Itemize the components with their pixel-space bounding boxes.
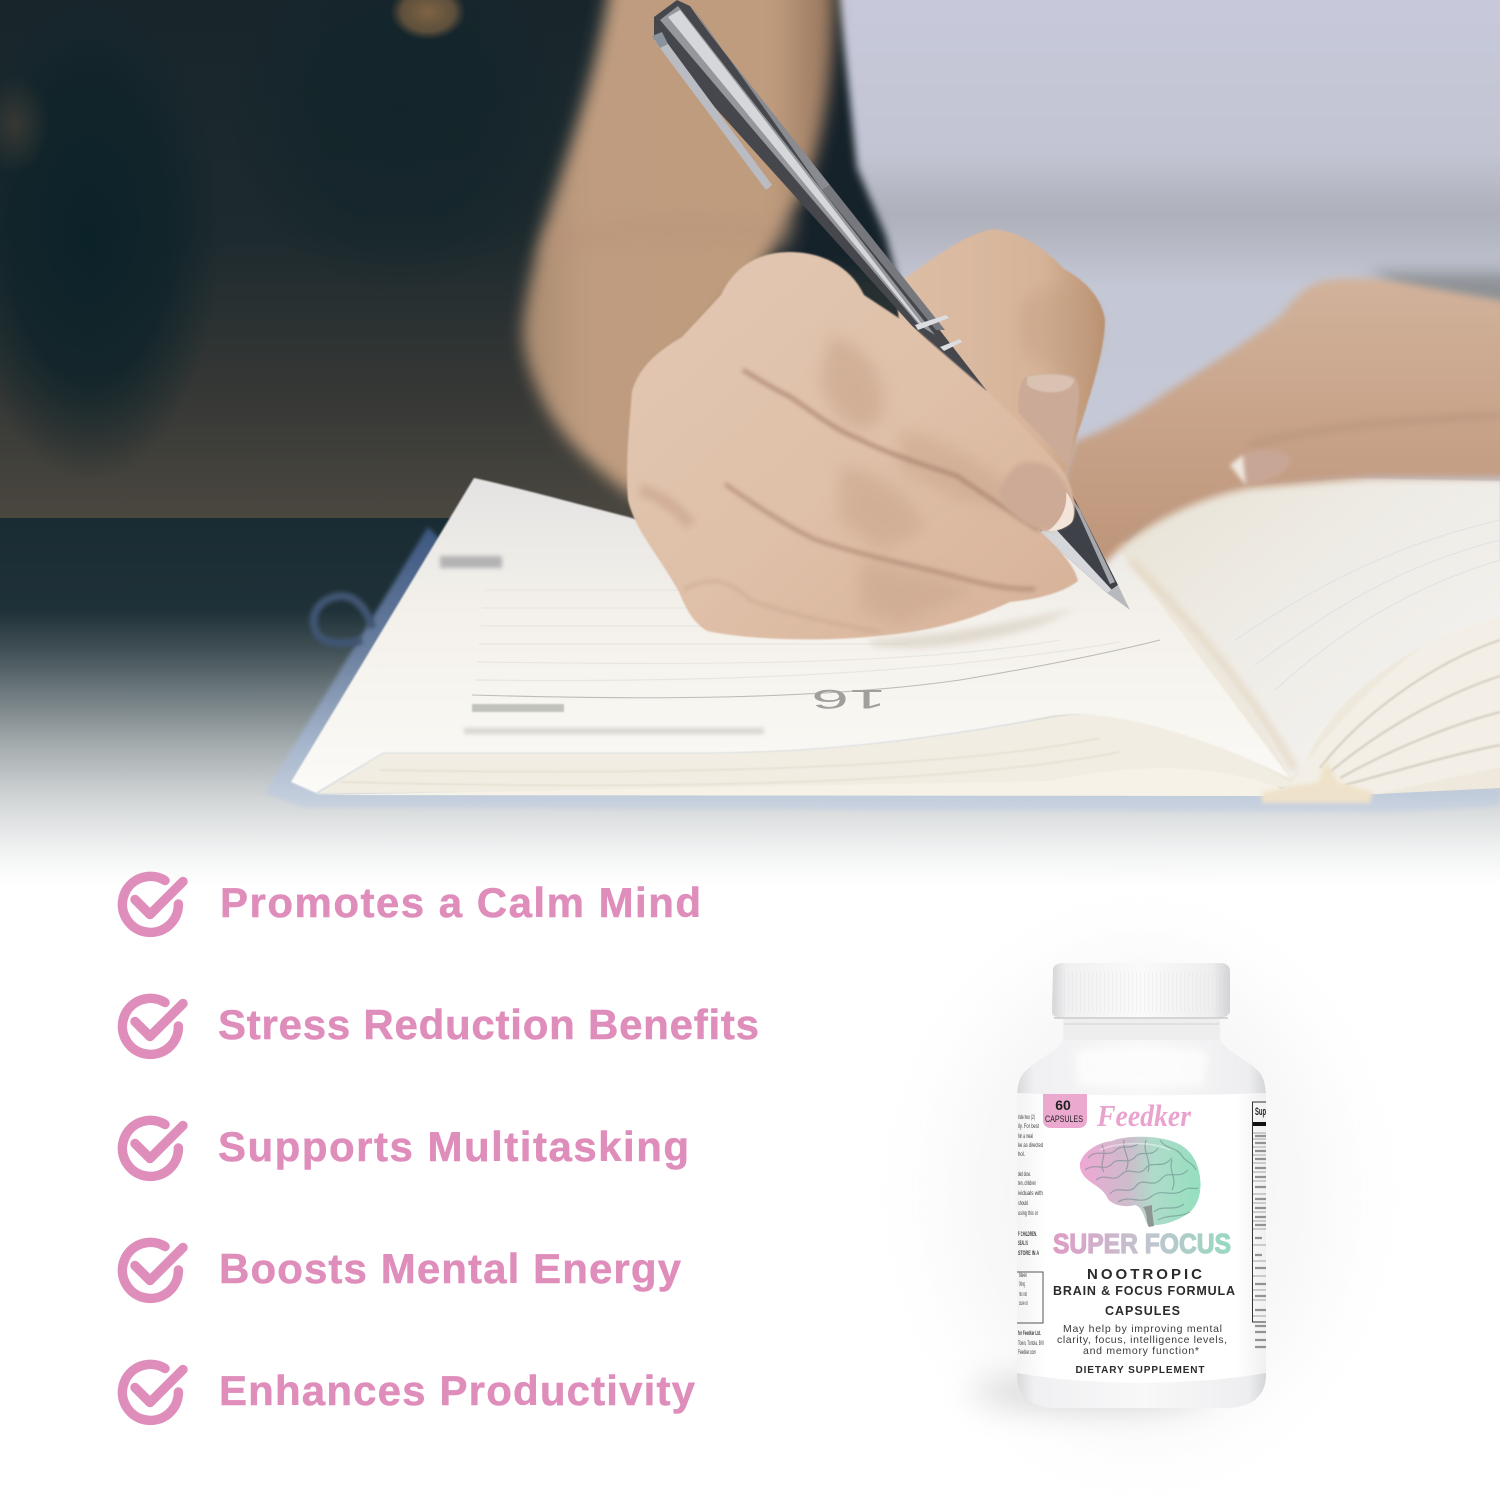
product subtitle bbox=[1053, 1266, 1235, 1318]
benefit: Promotes a Calm Mind bbox=[122, 876, 701, 932]
right hand bbox=[1064, 278, 1500, 568]
product bottle: Town, Tortola, BVI bbox=[1018, 1340, 1044, 1347]
notebook left page bbox=[291, 478, 1290, 793]
label left panel text: 00mg bbox=[1019, 1281, 1025, 1288]
notebook cover bbox=[265, 527, 1500, 812]
label left panel text bbox=[1018, 1114, 1044, 1356]
page number 16: 16 bbox=[811, 684, 887, 715]
benefit: Supports Multitasking bbox=[122, 1120, 689, 1176]
notebook page stack bbox=[316, 714, 1295, 795]
photo: hand writing in a notebook bbox=[0, 0, 1500, 888]
writing hand fist bbox=[627, 252, 1078, 639]
label left panel text: hin a meal bbox=[1018, 1133, 1033, 1140]
label left panel text: ten, children bbox=[1018, 1180, 1036, 1187]
benefit: Boosts Mental Energy: Boosts Mental Energy bbox=[219, 1245, 682, 1292]
label bbox=[1017, 1093, 1266, 1383]
brain illustration bbox=[1080, 1137, 1201, 1227]
product description: clarity, focus, intelligence levels, bbox=[1057, 1334, 1227, 1346]
forearm bbox=[523, 0, 834, 500]
notebook right page bbox=[1122, 478, 1500, 778]
index fingernail bbox=[998, 462, 1071, 530]
benefit: Enhances Productivity: Enhances Productivity bbox=[219, 1367, 696, 1414]
benefit: Enhances Productivity bbox=[122, 1364, 696, 1420]
label left panel text: ke as directed bbox=[1018, 1142, 1043, 1149]
label left panel text: should bbox=[1018, 1200, 1028, 1207]
benefits list bbox=[122, 876, 759, 1420]
product name: Super Focus: SUPER FOCUS bbox=[1053, 1228, 1231, 1259]
knuckle and crease shading bbox=[820, 335, 883, 428]
shirt bbox=[836, 0, 1500, 580]
label left panel text: ride two (2) bbox=[1018, 1114, 1035, 1121]
label left panel text: ividuals with bbox=[1018, 1190, 1043, 1197]
label supplement facts strip: Sup bbox=[1255, 1106, 1266, 1118]
label left panel text: ily. For best bbox=[1018, 1123, 1039, 1130]
product description bbox=[1057, 1323, 1227, 1357]
label left panel text: for Feedker Ltd. bbox=[1018, 1330, 1041, 1337]
product subtitle: NOOTROPIC bbox=[1087, 1266, 1202, 1283]
label left panel text: F CHILDREN. bbox=[1018, 1231, 1037, 1238]
benefit: Stress Reduction Benefits: Stress Reduction Benefits bbox=[218, 1001, 759, 1048]
product description: May help by improving mental bbox=[1063, 1323, 1222, 1335]
bottle shoulder highlight bbox=[1075, 1048, 1208, 1086]
cap bbox=[1052, 963, 1230, 1024]
white lower panel bbox=[0, 884, 1500, 1500]
dietary supplement: DIETARY SUPPLEMENT bbox=[1076, 1365, 1204, 1376]
badge: 60 capsules bbox=[1043, 1094, 1087, 1128]
label left panel text: cure or bbox=[1019, 1300, 1028, 1307]
pen bbox=[652, 0, 1130, 610]
benefit: Supports Multitasking: Supports Multitasking bbox=[218, 1123, 689, 1170]
product description: and memory function* bbox=[1083, 1345, 1199, 1357]
bottle body bbox=[1017, 1040, 1266, 1408]
product bottle bbox=[945, 955, 1335, 1435]
brand: Feedker: Feedker bbox=[1096, 1098, 1192, 1133]
product subtitle: BRAIN & FOCUS FORMULA bbox=[1053, 1284, 1235, 1298]
thumb bbox=[895, 229, 1105, 480]
label left panel text: using this or bbox=[1018, 1210, 1038, 1217]
benefit: Boosts Mental Energy bbox=[122, 1242, 682, 1298]
label left panel text: nts not bbox=[1019, 1291, 1027, 1298]
label left panel text: ded dose. bbox=[1018, 1171, 1031, 1178]
label left panel text: STORE IN A bbox=[1018, 1250, 1039, 1257]
notebook right page stack bbox=[1290, 600, 1500, 794]
label left panel text: hol. bbox=[1018, 1151, 1025, 1158]
label left panel text: Feedker.com bbox=[1018, 1349, 1036, 1356]
white fade bbox=[0, 610, 1500, 885]
hand shadow on page bbox=[870, 608, 1078, 648]
book backing under the spine bbox=[1100, 540, 1500, 794]
label left panel text: bteen bbox=[1019, 1272, 1027, 1279]
badge: 60 capsules: 60 bbox=[1055, 1097, 1071, 1113]
ribbon loop bbox=[314, 596, 372, 643]
neck bbox=[1063, 1015, 1220, 1052]
faint ruled lines bbox=[475, 590, 1120, 681]
label left panel text: SEAL IS bbox=[1018, 1240, 1028, 1247]
bottle shadow bbox=[945, 955, 1335, 1435]
benefit: Promotes a Calm Mind: Promotes a Calm Mind bbox=[220, 879, 701, 926]
product subtitle: CAPSULES bbox=[1105, 1304, 1180, 1318]
badge: 60 capsules: CAPSULES bbox=[1045, 1114, 1083, 1124]
label supplement facts strip bbox=[1252, 1102, 1266, 1347]
